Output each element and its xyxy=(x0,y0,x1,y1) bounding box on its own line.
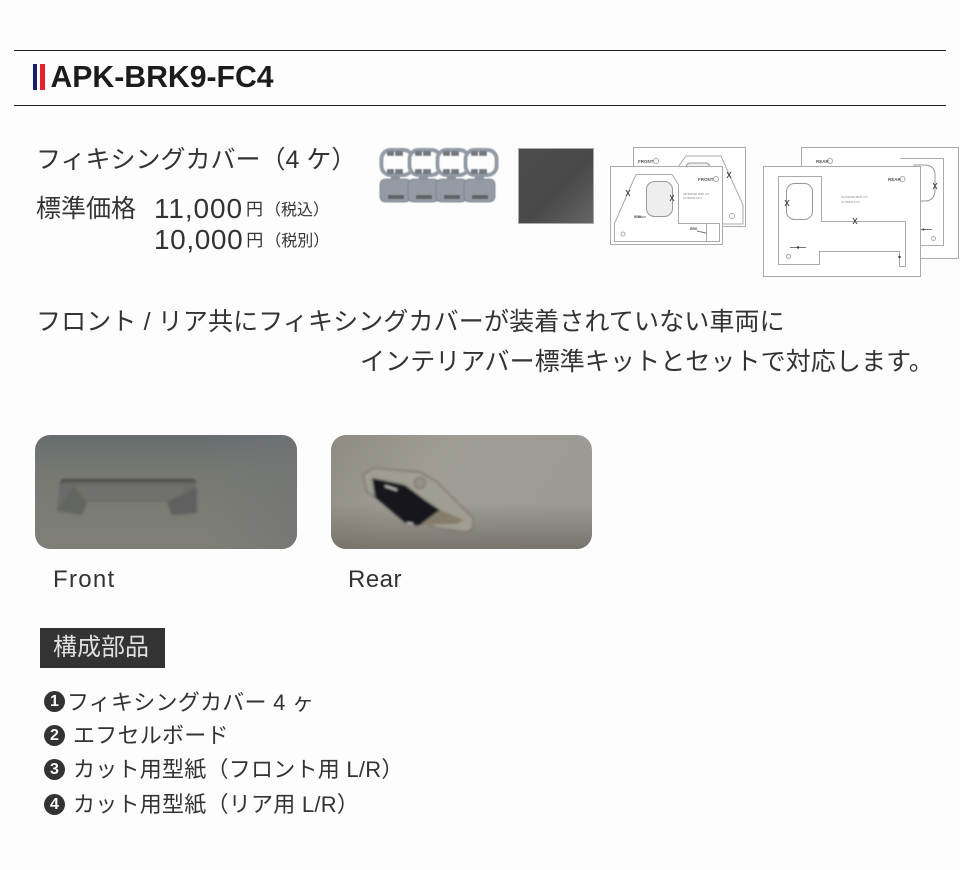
price block xyxy=(36,193,329,255)
product name: フィキシングカバー（4 ケ） xyxy=(36,146,356,174)
title: APK-BRK9-FC4 xyxy=(50,61,274,94)
icon: felt board swatch xyxy=(518,148,594,224)
caption: rear: Rear xyxy=(348,566,402,593)
description line 1: フロント / リア共にフィキシングカバーが装着されていない車両に xyxy=(36,308,785,336)
front sheet: front L xyxy=(610,166,722,244)
back sheet: rear R xyxy=(802,148,958,258)
part 3: カット用型紙（フロント用 L/R） xyxy=(73,757,404,782)
back sheet: front R xyxy=(634,148,746,226)
rear cut templates xyxy=(763,147,959,277)
caption: front: Front xyxy=(53,566,116,593)
photo: front grip xyxy=(35,435,297,549)
part 3: 3 xyxy=(50,761,59,778)
front cut templates xyxy=(610,147,746,245)
front sheet: front L: FRONT xyxy=(698,177,714,182)
price excluding tax: 10,000円（税別） xyxy=(154,224,329,255)
back sheet: front R: FRONT xyxy=(638,159,654,164)
back sheet: rear R: REAR xyxy=(816,159,830,164)
front sheet: rear L: REAR xyxy=(888,177,902,182)
front sheet: front L: INTERIOR BAR KIT xyxy=(683,192,710,196)
part 1: フィキシングカバー 4 ヶ xyxy=(67,690,314,715)
price including tax: 11,000円（税込） xyxy=(154,193,329,224)
photo: rear grip xyxy=(331,435,592,549)
front sheet: front L: for BRK9-FC4 xyxy=(683,196,702,200)
front sheet: rear L: INTERIOR BAR KIT xyxy=(841,195,868,199)
parts heading xyxy=(40,628,165,668)
price label: 標準価格 xyxy=(36,195,136,223)
description text xyxy=(36,308,934,376)
parts list xyxy=(44,690,404,817)
icon: tricolor flag bars xyxy=(33,64,45,90)
front sheet: rear L: for BRK9-FC4 xyxy=(841,200,860,204)
front sheet: rear L xyxy=(764,166,920,276)
front sheet: front L: BRK xyxy=(690,227,698,231)
parts heading: 構成部品 xyxy=(53,634,149,661)
icon: four fixing covers xyxy=(378,147,500,203)
part 4: 4 xyxy=(50,796,59,813)
description line 2: インテリアバー標準キットとセットで対応します。 xyxy=(360,348,934,376)
part 4: カット用型紙（リア用 L/R） xyxy=(73,792,359,817)
part 2: エフセルボード xyxy=(73,723,229,748)
part 1: 1 xyxy=(50,693,59,710)
front sheet: front L: BRK xyxy=(634,215,642,219)
part 2: 2 xyxy=(50,727,59,744)
